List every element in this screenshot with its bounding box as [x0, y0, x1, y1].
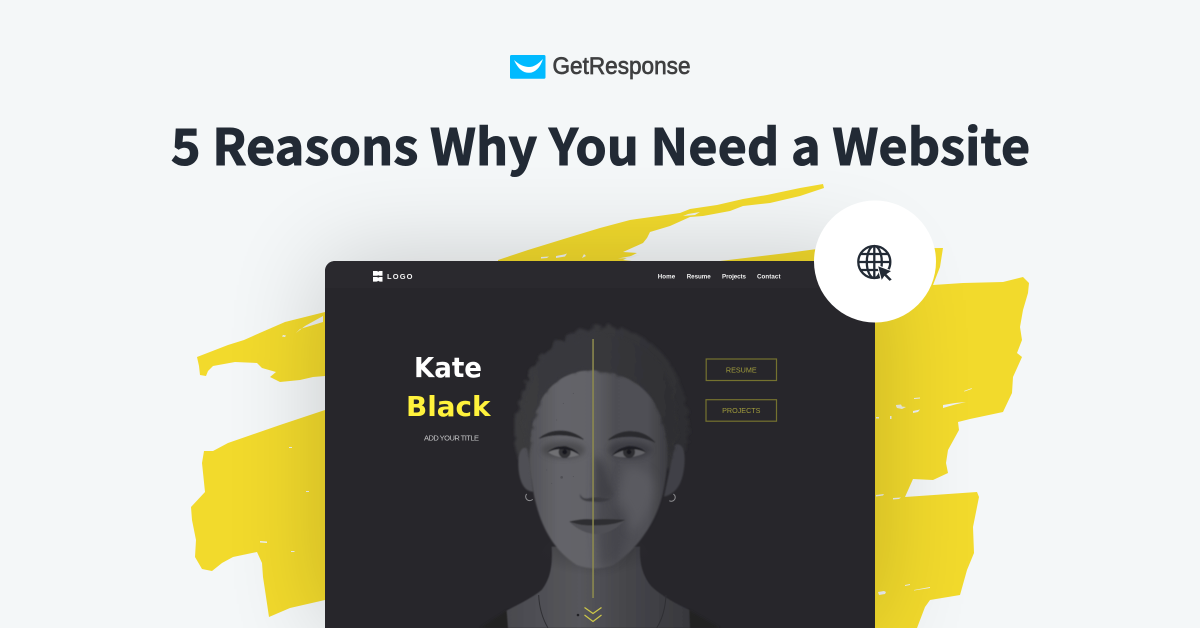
button: resume: RESUME	[726, 365, 757, 374]
hair front	[527, 370, 664, 450]
right eye	[612, 446, 646, 458]
hero name: Black	[406, 390, 492, 423]
freckles	[546, 393, 574, 484]
panel: website mockup	[325, 261, 875, 628]
logo: GetResponse	[510, 53, 690, 80]
portrait photo	[480, 326, 720, 628]
face	[529, 370, 668, 568]
site logo text: LOGO	[387, 272, 413, 281]
vertical line	[592, 339, 594, 598]
icon: globe with cursor	[858, 246, 892, 282]
button: projects	[706, 400, 776, 421]
soft panel shadow	[325, 261, 875, 628]
hero name: Kate	[414, 351, 482, 384]
right cheek light	[622, 470, 652, 522]
earrings	[526, 494, 675, 501]
navigation: Contact	[757, 273, 780, 280]
scroll dot	[577, 614, 579, 616]
mouth	[569, 519, 625, 534]
navigation: Projects	[722, 273, 747, 280]
eyebrows	[539, 431, 655, 442]
neck shadow	[552, 547, 569, 561]
icon: double chevron	[584, 608, 602, 622]
brush stroke flecks	[260, 212, 972, 595]
left eye	[547, 446, 580, 458]
title: 5 Reasons Why You Need a Website	[171, 108, 1030, 180]
nav bar	[325, 261, 875, 288]
brush stroke: upper right	[720, 248, 1029, 628]
navigation: Resume	[687, 273, 711, 280]
hero name	[406, 351, 492, 423]
nose	[580, 460, 610, 502]
navigation: Home	[658, 273, 676, 280]
shirt	[484, 612, 716, 627]
ears	[518, 448, 533, 492]
necklace	[539, 595, 666, 628]
infographic canvas	[172, 55, 1029, 628]
button: resume	[706, 359, 776, 380]
eye sockets	[542, 441, 585, 459]
hair back	[516, 326, 688, 470]
neck and shoulders	[507, 547, 690, 628]
wordmark: GetResponse	[552, 53, 690, 80]
badge: globe circle	[814, 200, 936, 322]
hero subtitle: ADD YOUR TITLE	[424, 434, 479, 442]
icon: site logo mark	[373, 271, 382, 282]
navigation	[658, 273, 780, 280]
brush stroke: upper left	[197, 312, 340, 382]
right face shade	[594, 462, 620, 562]
yellow brush strokes	[191, 184, 1029, 628]
brush stroke: lower left	[191, 410, 340, 617]
button: projects: PROJECTS	[722, 406, 761, 415]
site logo	[373, 271, 413, 282]
brush stroke: top thin	[498, 184, 824, 264]
icon: blue envelope	[510, 55, 546, 79]
